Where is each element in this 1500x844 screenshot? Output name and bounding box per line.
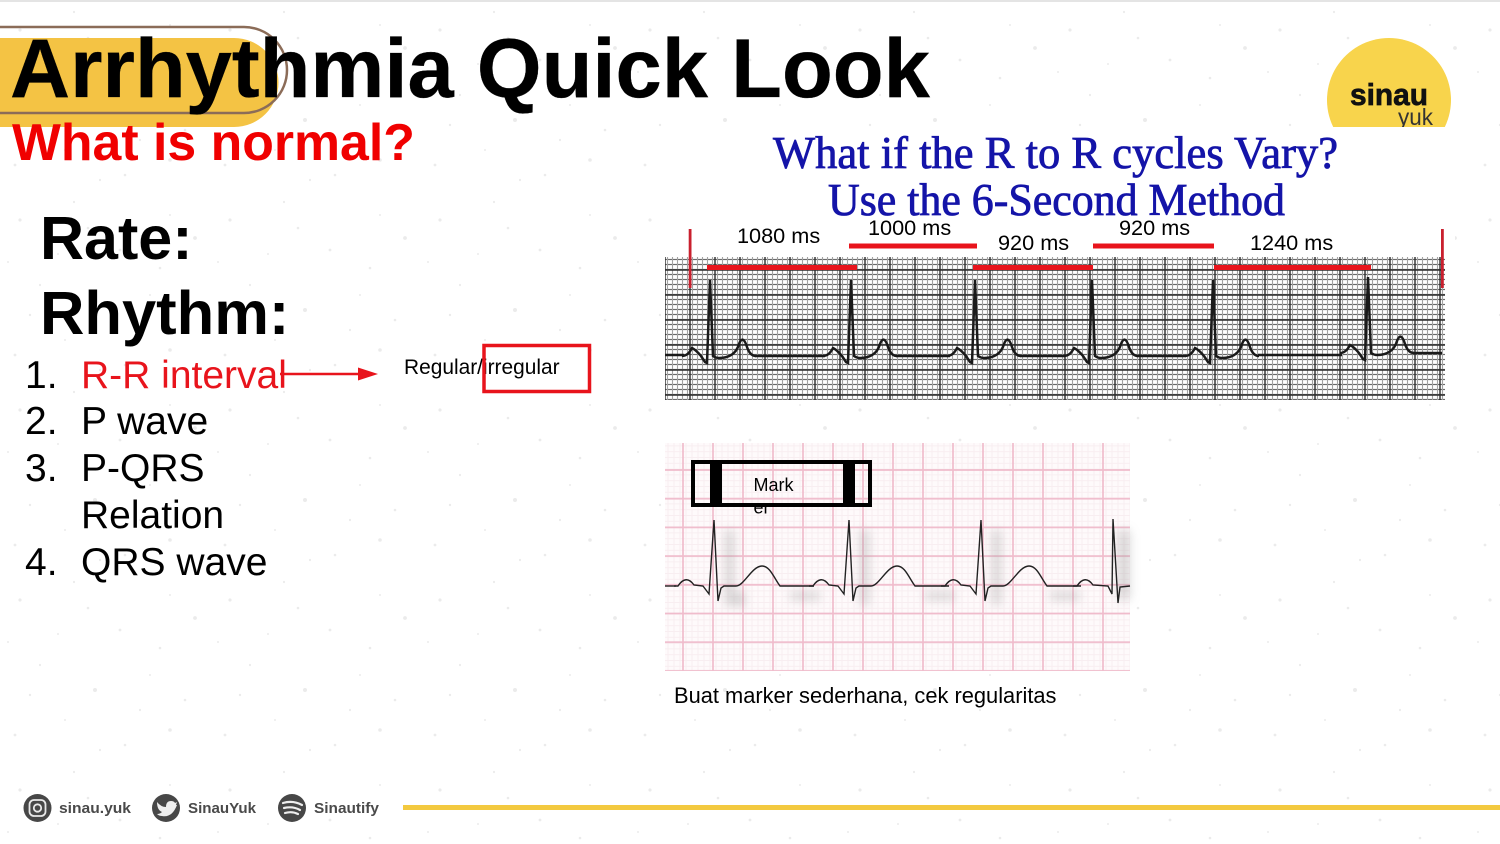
title: Arrhythmia Quick Look	[10, 22, 931, 115]
interval labels: 920 ms	[1119, 215, 1190, 240]
logo	[1327, 38, 1451, 130]
social: twitter: SinauYuk	[188, 800, 257, 817]
interval labels: 1080 ms	[737, 223, 820, 248]
logo: sinau	[1350, 77, 1428, 112]
regular or irregular callout: Regular/irregular	[404, 356, 560, 379]
interval labels: 1240 ms	[1250, 230, 1333, 255]
marker label: Mark	[754, 475, 794, 495]
rhythm checklist: Relation	[81, 494, 224, 537]
social: instagram	[24, 794, 132, 822]
heading: rate and rhythm: Rate:	[40, 204, 193, 272]
rhythm checklist: 4.	[25, 541, 58, 584]
subtitle: What is normal?	[12, 113, 415, 171]
regular or irregular callout	[404, 346, 590, 392]
marker label: er	[754, 498, 770, 518]
social: spotify	[278, 794, 380, 822]
ECG strip	[665, 257, 1445, 400]
rhythm checklist	[25, 354, 287, 584]
marker caption: Buat marker sederhana, cek regularitas	[674, 683, 1057, 708]
heading: rate and rhythm: Rhythm:	[40, 279, 289, 348]
marker tool	[693, 462, 870, 505]
method heading	[773, 128, 1338, 225]
rhythm checklist: QRS wave	[81, 541, 267, 584]
interval labels: 1000 ms	[868, 215, 951, 240]
rhythm checklist: 2.	[25, 400, 58, 443]
interval labels: 920 ms	[998, 230, 1069, 255]
heading: rate and rhythm	[40, 204, 289, 348]
rhythm checklist: R-R interval	[81, 354, 287, 397]
soft scan shadows	[725, 530, 1130, 606]
social: spotify: Sinautify	[314, 800, 380, 817]
social: instagram: sinau.yuk	[59, 800, 132, 817]
method heading: Use the 6-Second Method	[828, 175, 1285, 225]
method heading: What if the R to R cycles Vary?	[773, 128, 1338, 178]
title banner	[0, 27, 287, 127]
rhythm checklist: P-QRS	[81, 447, 205, 490]
rhythm checklist: P wave	[81, 400, 208, 443]
panel: marker ECG	[665, 443, 1130, 671]
social: twitter	[152, 794, 257, 822]
footer rule	[403, 805, 1500, 810]
ECG trace	[665, 519, 1130, 603]
interval bars	[689, 229, 1444, 288]
interval labels	[737, 215, 1333, 255]
rhythm checklist: 3.	[25, 447, 58, 490]
rhythm checklist: 1.	[25, 354, 58, 397]
arrow: R-R interval to regularity	[280, 368, 378, 380]
logo: yuk	[1398, 104, 1433, 130]
panel: six-second method	[665, 127, 1455, 400]
